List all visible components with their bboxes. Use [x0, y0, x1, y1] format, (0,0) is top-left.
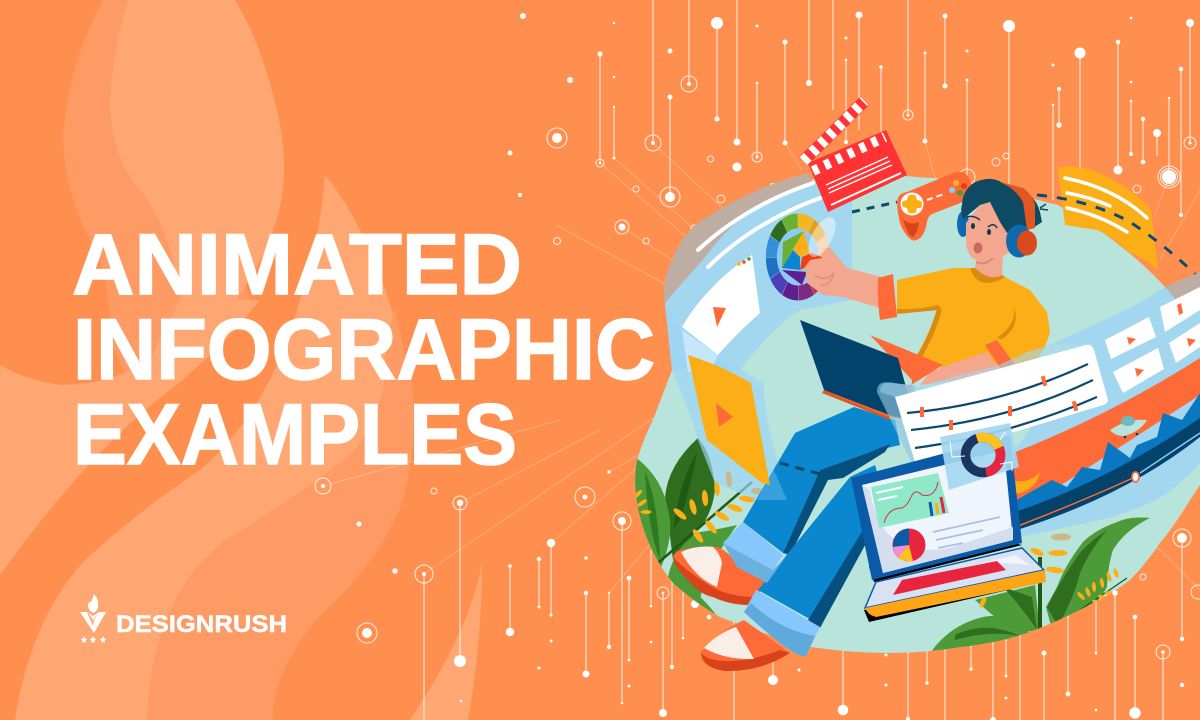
other arm	[920, 352, 1005, 385]
yellow document top right	[1058, 166, 1158, 270]
head with headphones	[957, 179, 1048, 283]
orange sky	[1013, 358, 1200, 515]
title: ANIMATED	[72, 217, 522, 313]
glass tint on thigh	[757, 468, 787, 500]
dark laptop behind	[800, 320, 943, 420]
translucent top strip	[880, 344, 1092, 397]
title	[72, 217, 655, 483]
shadow	[864, 578, 1040, 622]
left ear cup	[957, 211, 969, 237]
illustration	[630, 97, 1200, 671]
fingertip glass	[803, 213, 841, 261]
title: INFOGRAPHIC	[73, 302, 655, 398]
glass band top left	[664, 173, 852, 370]
ribbon scene	[880, 272, 1200, 537]
white video window	[682, 255, 760, 372]
shoe lower	[701, 620, 790, 671]
ufo	[1110, 416, 1147, 438]
hair	[961, 179, 1042, 233]
torso	[897, 268, 1050, 372]
face	[966, 202, 1010, 263]
DesignRush logo	[80, 594, 287, 643]
opaque glass	[1000, 272, 1200, 537]
navy track	[1015, 418, 1200, 530]
legs and shoes	[673, 407, 900, 671]
shoe upper	[673, 546, 767, 605]
crescent	[1010, 472, 1040, 495]
text lines	[933, 517, 1000, 548]
tan grains behind glass	[725, 471, 763, 494]
glass donut panel	[940, 423, 1019, 490]
foreground dot on plant edge	[1112, 590, 1118, 596]
mint chart card	[871, 473, 949, 528]
thigh and shin upper	[743, 407, 900, 553]
thigh shadow	[783, 444, 890, 555]
wheat grains left	[633, 480, 755, 544]
red keypad	[893, 561, 1006, 595]
gamepad	[897, 172, 973, 240]
clapperboard	[799, 97, 907, 212]
yellow document with play button	[688, 355, 770, 485]
eyes and brows	[971, 223, 975, 229]
screen frame	[851, 436, 1022, 580]
plants bottom right	[931, 518, 1150, 654]
keyboard base	[865, 548, 1044, 608]
glass strip behind legs	[665, 303, 787, 500]
white timeline panel	[877, 345, 1108, 470]
icon: flame and V mark	[80, 594, 106, 643]
plants left	[630, 438, 755, 620]
ear cup	[1006, 224, 1032, 258]
network lines and dots	[315, 0, 1200, 720]
blue mountains	[1013, 393, 1200, 515]
sprig	[1040, 204, 1048, 210]
mouth	[974, 242, 982, 254]
shin lower	[758, 465, 885, 622]
pie chart	[892, 528, 926, 562]
laptop front	[851, 436, 1046, 622]
mint blob backdrop	[635, 176, 1200, 653]
neck	[973, 255, 1003, 280]
screen	[862, 450, 1013, 573]
thumbnail cards	[1105, 287, 1200, 393]
sleeve cuff	[878, 274, 897, 320]
color wheel	[762, 208, 834, 306]
dashed path arrow	[780, 195, 1196, 474]
title: EXAMPLES	[73, 387, 517, 483]
person torso and arm	[803, 213, 1050, 385]
wordmark: DESIGNRUSH	[116, 611, 287, 638]
wheat grains right	[978, 534, 1120, 608]
headband	[1000, 182, 1035, 230]
front edge	[865, 570, 1046, 617]
background flame shapes	[0, 0, 482, 720]
jean cuffs	[723, 522, 783, 570]
arm and hand	[805, 248, 882, 308]
